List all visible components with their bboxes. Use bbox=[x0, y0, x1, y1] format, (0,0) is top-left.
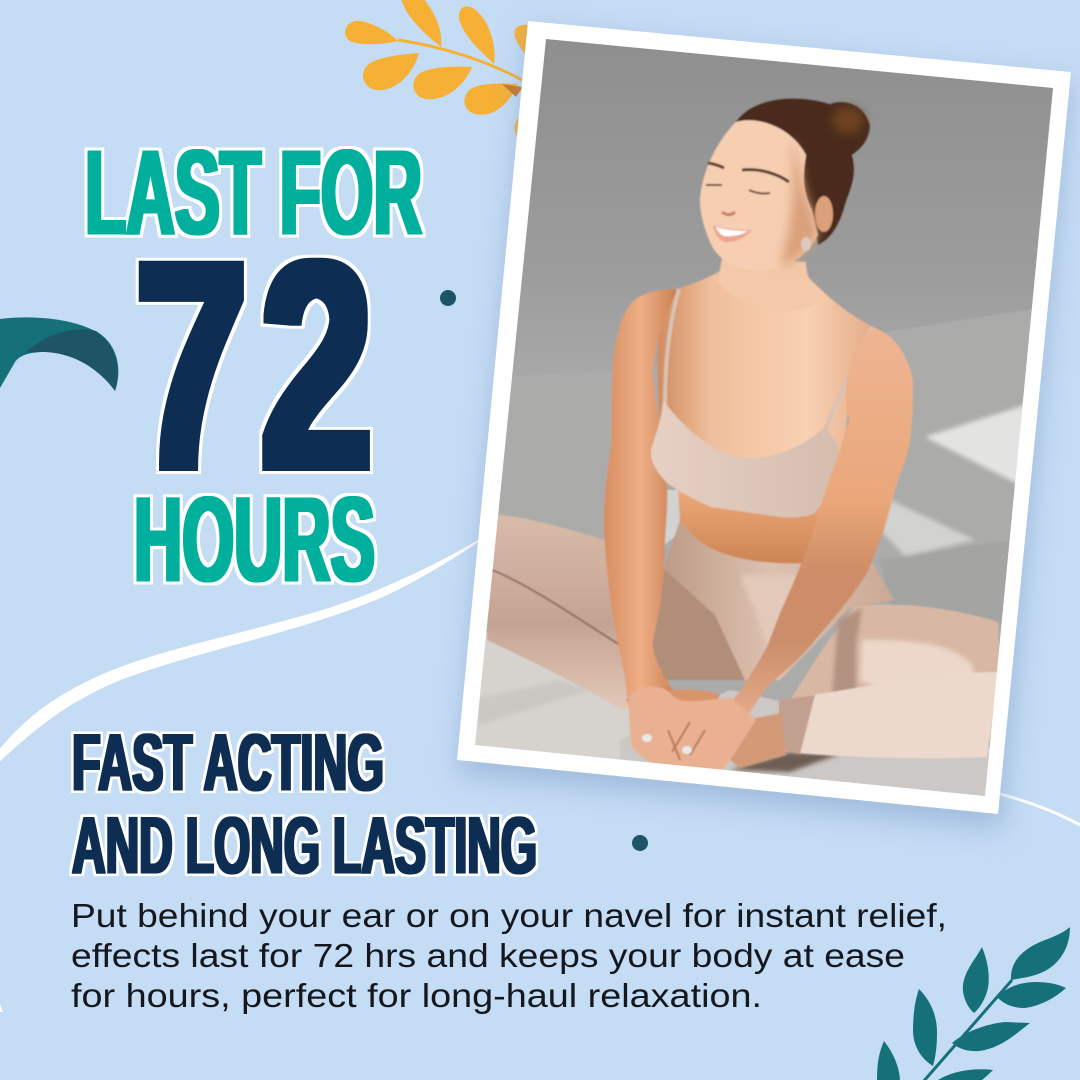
headline: 72: 72 bbox=[135, 200, 385, 530]
face shading bbox=[780, 140, 818, 267]
decorative white curve bbox=[0, 541, 478, 760]
icon: orange branch bbox=[345, 0, 535, 140]
hair bun highlight bbox=[833, 107, 863, 133]
right shin bbox=[779, 672, 1000, 758]
subheading: fast acting: FAST ACTING bbox=[72, 718, 384, 808]
frame shadow bbox=[457, 30, 1071, 830]
bra top bbox=[651, 400, 839, 518]
photo frame bbox=[457, 21, 1071, 814]
headline: last for: LAST FOR bbox=[85, 124, 422, 260]
hands over feet bbox=[629, 687, 756, 770]
photo: woman doing seated stretch bbox=[460, 30, 1070, 800]
body text bbox=[71, 897, 947, 1014]
face bbox=[700, 120, 818, 270]
decorative white speck bbox=[0, 1004, 3, 1012]
dot upper bbox=[440, 290, 456, 306]
shin shadow bbox=[779, 695, 815, 754]
hair bbox=[736, 98, 870, 245]
icon: teal leaf branch bbox=[877, 927, 1070, 1080]
photo background bbox=[460, 30, 1070, 800]
left arm bbox=[604, 289, 678, 713]
bra straps bbox=[665, 289, 872, 430]
chest bbox=[657, 271, 873, 459]
eyes, brows, nose and mouth bbox=[706, 163, 789, 242]
dot lower bbox=[632, 835, 648, 851]
ear and earring bbox=[801, 196, 833, 251]
icon: teal leaf left bbox=[0, 317, 118, 391]
headline: hours: HOURS bbox=[134, 471, 375, 607]
body text: for hours, perfect for long-haul relaxation. bbox=[71, 977, 762, 1014]
foot behind hands bbox=[625, 689, 720, 702]
body text: Put behind your ear or on your navel for instant relief, bbox=[71, 897, 947, 934]
body text: effects last for 72 hrs and keeps your body at ease bbox=[71, 937, 905, 974]
neck bbox=[718, 258, 810, 307]
right thigh bbox=[790, 605, 1000, 700]
left leg bbox=[487, 515, 640, 712]
floor shadow under foot bbox=[730, 752, 840, 772]
pelvis and leggings bbox=[650, 520, 894, 680]
subheading: and long lasting: AND LONG LASTING bbox=[72, 801, 537, 891]
decorative white curve right bbox=[1000, 794, 1080, 825]
right foot bbox=[730, 713, 786, 768]
right arm bbox=[722, 327, 913, 718]
midriff bbox=[678, 490, 826, 563]
